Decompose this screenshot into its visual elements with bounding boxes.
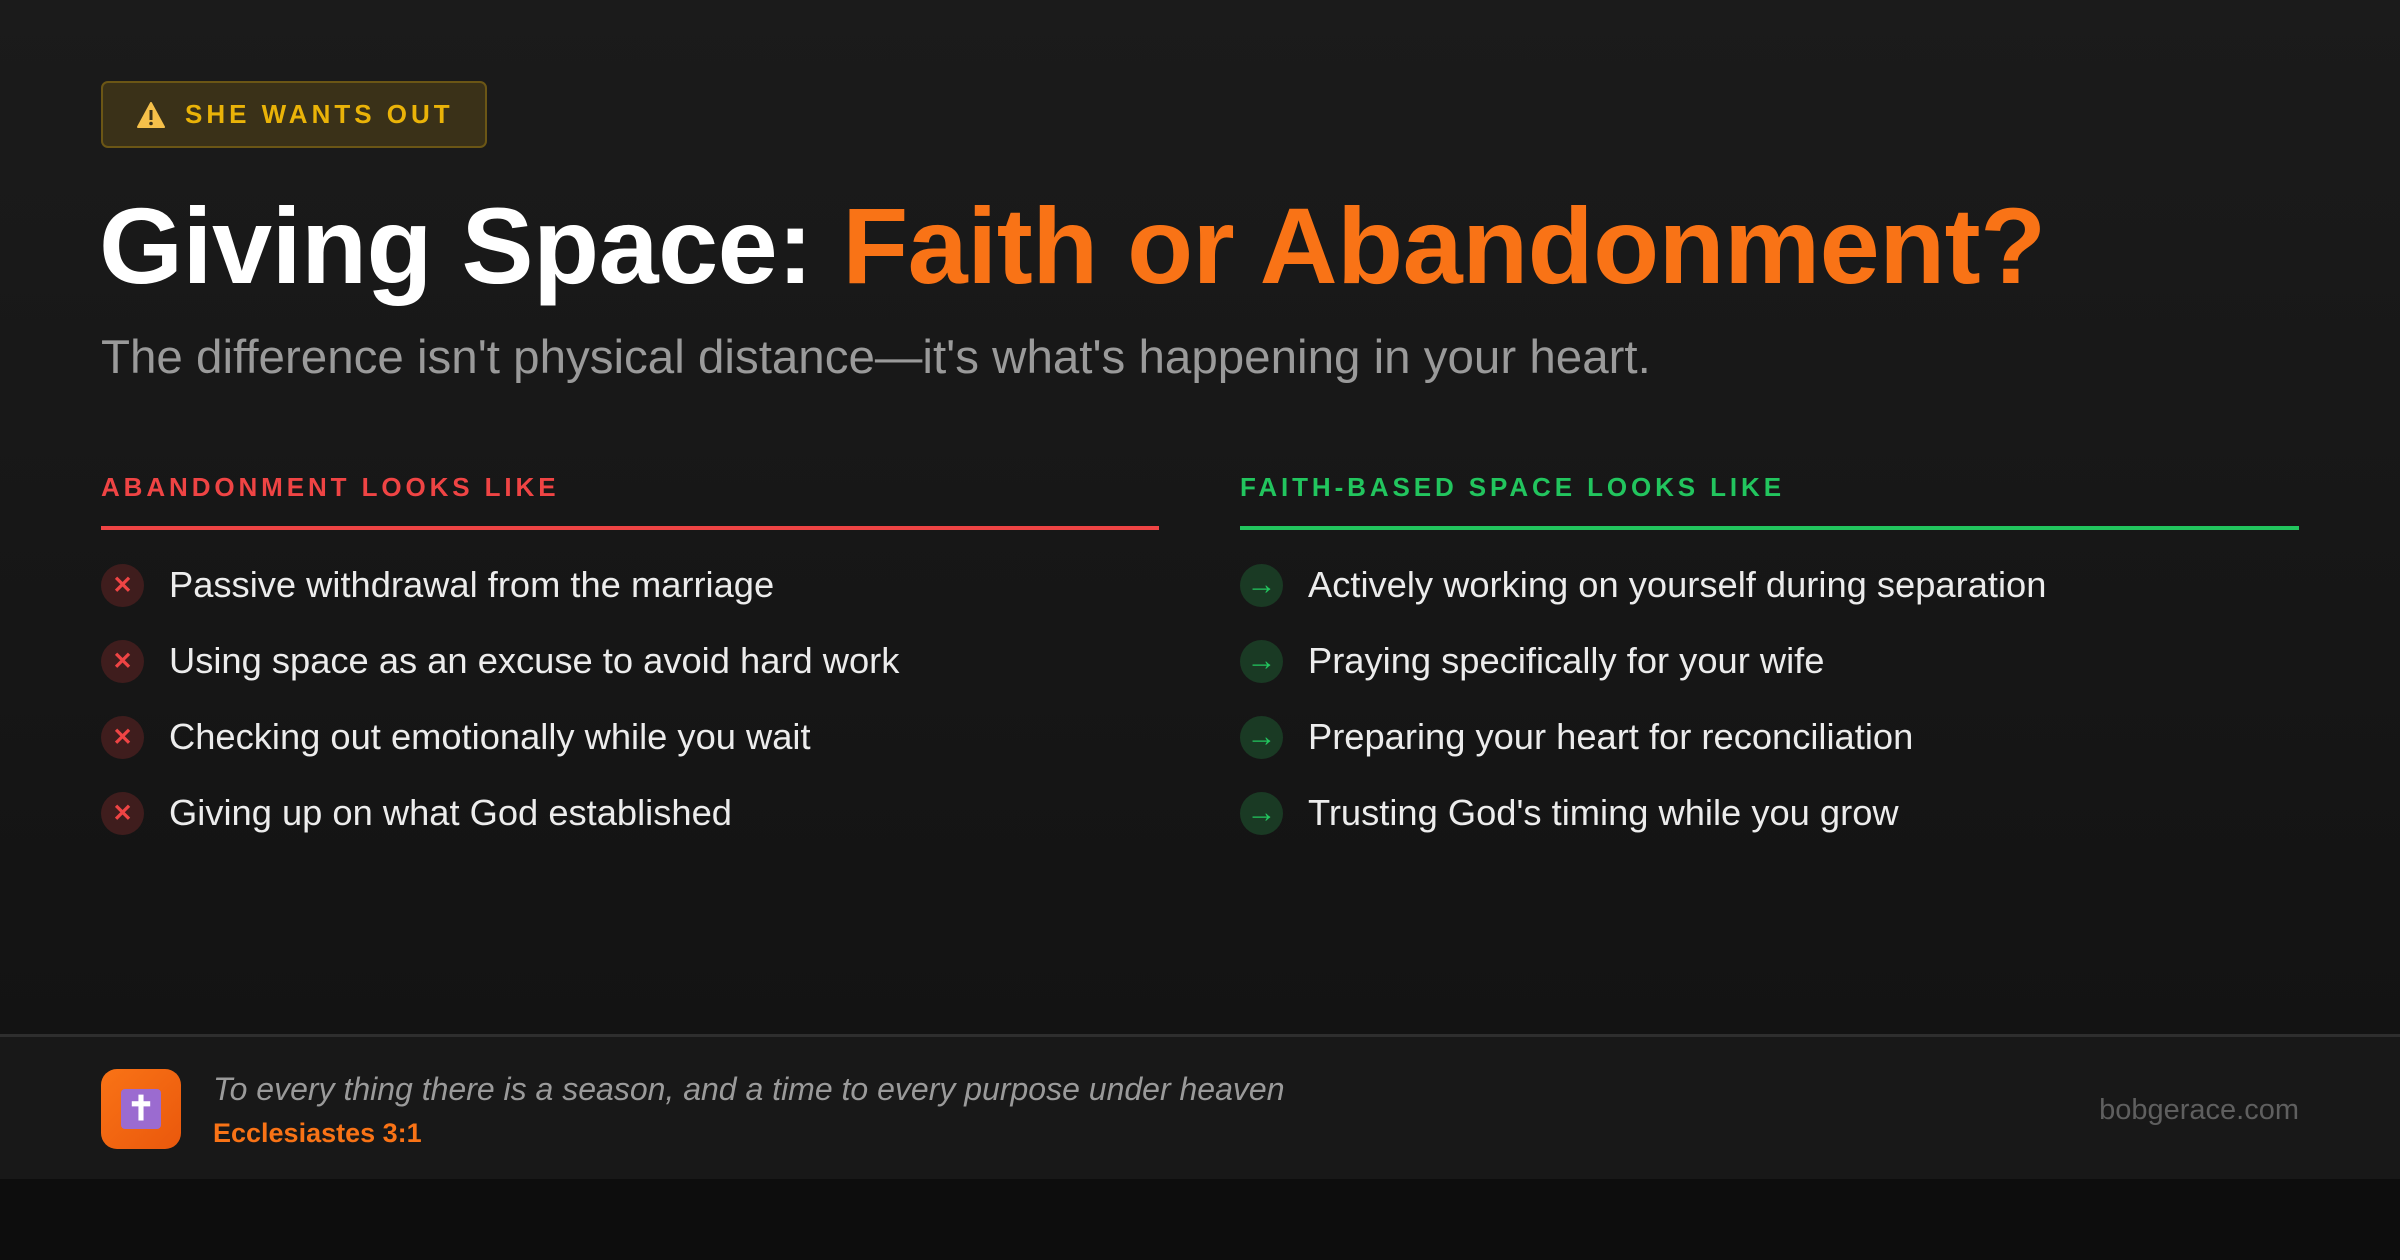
list: faith items: Preparing your heart for reconciliation bbox=[1308, 716, 1913, 757]
quote: To every thing there is a season, and a time to every purpose under heaven bbox=[213, 1071, 1284, 1107]
list: abandonment items: Checking out emotionally while you wait bbox=[169, 716, 811, 757]
list: abandonment items: ✕ bbox=[112, 648, 133, 674]
list: abandonment items: ✕ bbox=[112, 572, 133, 598]
heading: faith-based: FAITH-BASED SPACE LOOKS LIKE bbox=[1240, 472, 1785, 502]
icon: cross: ✝ bbox=[127, 1090, 155, 1128]
icon: cross bbox=[101, 1069, 181, 1149]
list: faith items: → bbox=[1246, 796, 1276, 829]
website: bobgerace.com bbox=[2099, 1094, 2299, 1126]
reference: Ecclesiastes 3:1 bbox=[213, 1118, 422, 1148]
list: abandonment items bbox=[101, 564, 900, 835]
list: faith items: Actively working on yourself during separation bbox=[1308, 564, 2046, 605]
heading: abandonment: ABANDONMENT LOOKS LIKE bbox=[101, 472, 559, 502]
badge: SHE WANTS OUT bbox=[185, 99, 454, 129]
list: faith items: Praying specifically for your wife bbox=[1308, 640, 1824, 681]
badge bbox=[101, 81, 487, 148]
panel: faith-based space bbox=[1240, 472, 2299, 835]
list: faith items bbox=[1240, 564, 2046, 835]
list: faith items: → bbox=[1246, 568, 1276, 601]
title: Giving Space: Faith or Abandonment? bbox=[99, 185, 2046, 306]
list: abandonment items: Using space as an excuse to avoid hard work bbox=[169, 640, 899, 681]
list: abandonment items: Passive withdrawal from the marriage bbox=[169, 564, 774, 605]
panel: abandonment bbox=[101, 472, 1159, 835]
list: abandonment items: ✕ bbox=[112, 724, 133, 750]
subtitle: The difference isn't physical distance—it's what's happening in your heart. bbox=[101, 331, 1651, 384]
list: faith items: Trusting God's timing while you grow bbox=[1308, 792, 1899, 833]
list: abandonment items: ✕ bbox=[112, 800, 133, 826]
list: faith items: → bbox=[1246, 720, 1276, 753]
list: faith items: → bbox=[1246, 644, 1276, 677]
list: abandonment items: Giving up on what God established bbox=[169, 792, 732, 833]
footer bbox=[0, 1034, 2400, 1179]
